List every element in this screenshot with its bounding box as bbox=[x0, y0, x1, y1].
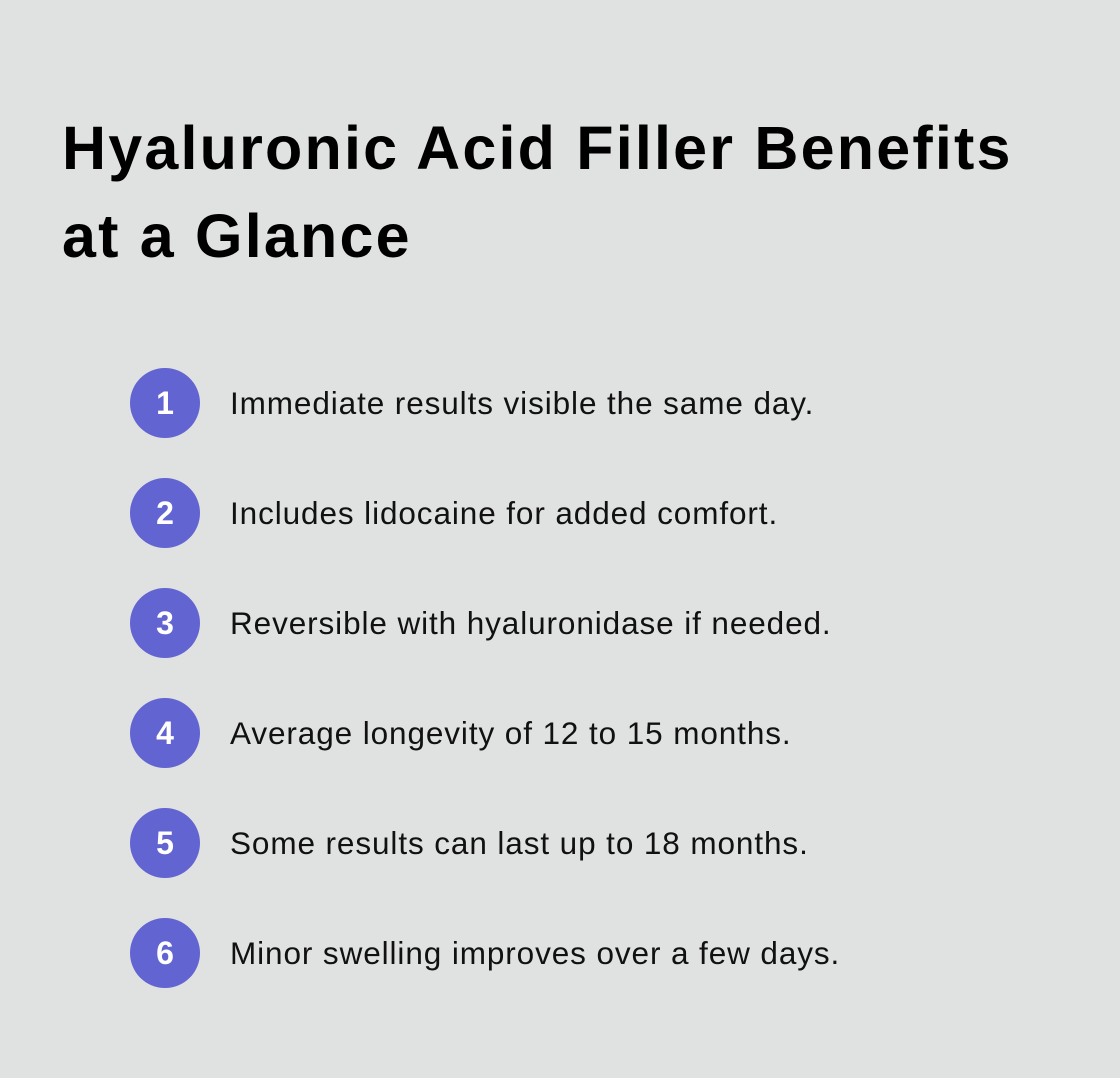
title: at a Glance bbox=[62, 202, 412, 270]
item 3: Reversible with hyaluronidase if needed. bbox=[230, 605, 832, 641]
item 5: 5 bbox=[156, 825, 174, 861]
item 2 bbox=[130, 478, 778, 548]
item 2: 2 bbox=[156, 495, 174, 531]
item 1 bbox=[130, 368, 814, 438]
item 6: 6 bbox=[156, 935, 174, 971]
title: Hyaluronic Acid Filler Benefits bbox=[62, 114, 1013, 182]
item 4: 4 bbox=[156, 715, 174, 751]
item 3 bbox=[130, 588, 832, 658]
item 5 bbox=[130, 808, 809, 878]
item 1: Immediate results visible the same day. bbox=[230, 385, 814, 421]
item 1: 1 bbox=[156, 385, 174, 421]
item 2: Includes lidocaine for added comfort. bbox=[230, 495, 778, 531]
item 5: Some results can last up to 18 months. bbox=[230, 825, 809, 861]
item 4: Average longevity of 12 to 15 months. bbox=[230, 715, 792, 751]
item 6: Minor swelling improves over a few days. bbox=[230, 935, 840, 971]
item 6 bbox=[130, 918, 840, 988]
item 3: 3 bbox=[156, 605, 174, 641]
title bbox=[62, 114, 1013, 270]
item 4 bbox=[130, 698, 792, 768]
